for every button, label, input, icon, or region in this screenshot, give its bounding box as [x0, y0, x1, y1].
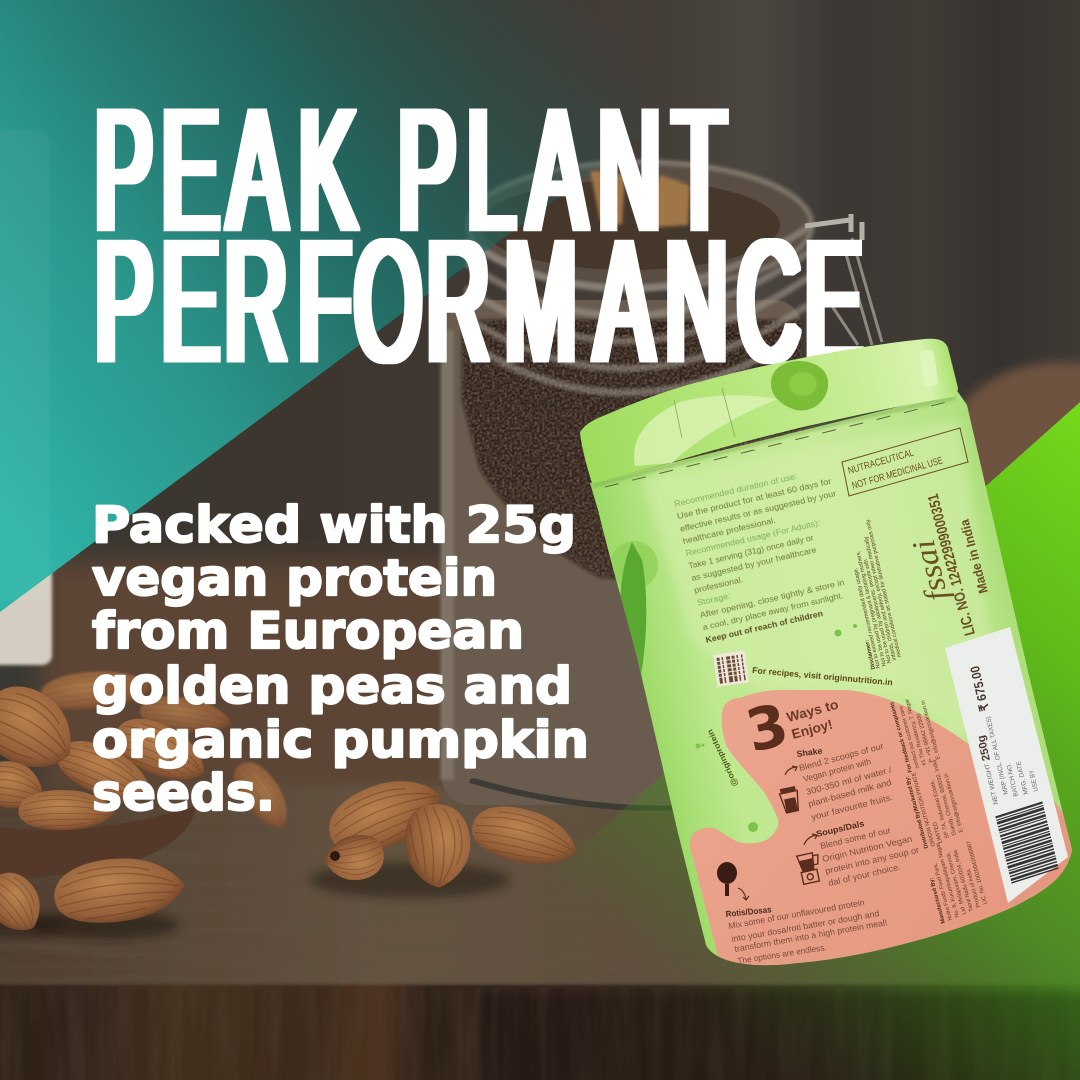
company details columns: ORIGIN NUTRITION PRIVATE — [911, 771, 937, 847]
body copy: Packed with 25g — [92, 496, 576, 554]
nutraceutical box — [842, 428, 968, 496]
rotis instructions: Rotis/Dosas — [725, 904, 772, 919]
usage text block: effective results or as suggested by your — [679, 488, 837, 534]
body copy: seeds. — [92, 764, 275, 822]
soups instructions: protein into any soup or — [824, 845, 920, 876]
bowl almonds — [0, 672, 215, 830]
company details columns: For feedback or complaints — [889, 701, 914, 773]
body copy: vegan protein — [92, 549, 497, 607]
body copy: from European — [92, 602, 524, 660]
usage text block: a cool, dry place away from sunlight. — [702, 590, 844, 632]
usage text block: Use the product for at least 60 days for — [676, 476, 832, 521]
white price label — [945, 627, 1068, 903]
three ways to enjoy heading — [740, 690, 840, 766]
disclaimer: Disclaimer: — [864, 639, 877, 670]
fssai licence — [905, 492, 991, 637]
usage text block: Recommended usage (For Adults): — [685, 518, 821, 558]
shake arrow — [785, 766, 797, 775]
company details columns: Nutra Foods Food Park, — [933, 861, 954, 921]
shake instructions: Vegan protein with — [802, 756, 872, 784]
rotis instructions — [725, 897, 888, 966]
lid — [580, 339, 958, 483]
dots — [696, 624, 857, 832]
company details columns: P: +91 98842 22500 — [916, 713, 935, 763]
usage text block — [673, 463, 863, 645]
nutraceutical box: NUTRACEUTICAL — [847, 447, 916, 477]
title: PEAK PLANT — [95, 73, 726, 268]
shake instructions: 300-350 ml of water / — [805, 764, 893, 797]
pea on lid — [771, 361, 828, 410]
barcode — [995, 801, 1059, 884]
net weight: 250g — [975, 734, 993, 762]
company details columns: SP 7A, Industrial Estate, — [929, 779, 951, 839]
usage text block: Keep out of reach of children — [705, 608, 824, 645]
social handle: @originprotein — [705, 728, 740, 788]
shake instructions — [796, 741, 894, 822]
usage text block: as suggested by your healthcare — [690, 544, 817, 583]
company details columns: Product of India. — [965, 867, 982, 908]
back almonds blurred — [39, 667, 154, 713]
usage text block: Take 1 serving (31g) once daily or — [687, 532, 815, 571]
soups instructions: Blend some of our — [819, 825, 892, 851]
product jar — [580, 339, 1080, 980]
white price label: USE BY — [1028, 768, 1040, 792]
disclaimer: Not to exceed recommended daily usage. — [853, 567, 882, 669]
company details columns: No. 8, Kurumbapalayam Nagar, — [935, 840, 961, 918]
almond shadows — [310, 862, 510, 898]
bowl — [0, 806, 196, 882]
company details columns: Guindy, Chennai, 600032, India — [932, 758, 958, 836]
pea pod illustration — [610, 541, 658, 680]
shake instructions: Blend 2 scoops of our — [798, 741, 885, 773]
QR code — [713, 651, 749, 687]
soups instructions — [815, 818, 920, 888]
table front edge — [0, 985, 1080, 1080]
company details columns — [889, 698, 989, 924]
blurred wooden table behind almonds — [40, 560, 470, 810]
fssai licence: fssai — [905, 536, 955, 605]
jar body — [590, 392, 1072, 965]
fssai licence: LIC. NO. 12422999000351 — [925, 492, 979, 637]
rotis instructions: into your dosa/roti batter or dough and — [731, 908, 880, 944]
soups instructions: Soups/Dals — [815, 818, 865, 839]
company details columns: Ltd. Melapuram, Chennai, — [945, 851, 968, 915]
usage text block: Storage: — [696, 590, 731, 608]
white bottle at far left — [0, 560, 52, 665]
soups arrow — [804, 834, 817, 845]
fssai licence: Made in India — [957, 517, 991, 595]
pan icon — [717, 862, 749, 900]
disclaimer: infants, children and elderly, except when medically — [863, 536, 898, 661]
rotis instructions: The options are endless. — [737, 942, 827, 966]
pink label area — [690, 690, 1080, 980]
shake instructions: plant-based milk and — [807, 777, 893, 809]
disclaimer: Not to be used by pregnant & lactating mothers. — [855, 550, 888, 667]
title — [95, 73, 863, 399]
shaker icon — [779, 786, 801, 814]
disclaimer — [853, 517, 903, 670]
body copy — [92, 496, 589, 822]
three ways to enjoy heading: 3 — [740, 690, 794, 766]
usage text block: Recommended duration of use: — [673, 471, 798, 509]
company details columns: #1 The Residency, T. Nagar — [904, 698, 928, 766]
three ways to enjoy heading: Ways to — [785, 697, 840, 725]
almonds and bowl — [0, 667, 583, 943]
company details columns: Tamil Nadu 602024, India — [952, 848, 975, 912]
white price label: MRP (INCL. OF ALL TAXES) — [985, 716, 1010, 795]
light blob on body — [642, 420, 1000, 740]
white price label: BATCH NO. — [1005, 762, 1020, 797]
body copy: golden peas and — [92, 657, 572, 715]
three ways to enjoy heading: Enjoy! — [790, 717, 834, 742]
title: PERFORMANCE — [95, 204, 863, 399]
usage text block: After opening, close tightly & store in — [699, 577, 846, 620]
white price label: MFG. DATE — [1015, 760, 1030, 795]
faint bottle ghost in teal — [0, 130, 50, 600]
green diagonal panel — [320, 402, 1080, 1080]
blender icon — [797, 852, 823, 884]
soups instructions: dal of your choice. — [827, 862, 902, 888]
company details columns: Manufactured By: — [929, 877, 947, 924]
company details columns: Distributed By/Marketed By: — [905, 775, 930, 849]
teal diagonal panel — [0, 0, 824, 612]
shake instructions: your favourite fruits. — [810, 792, 894, 822]
recipes link: For recipes, visit originnutrition.in — [752, 665, 893, 687]
disclaimer: medical conditions as stated for illustrative purposes only. — [865, 517, 903, 658]
disclaimer: Not to be used by adolescents, people with — [863, 559, 893, 664]
nutraceutical box: NOT FOR MEDICINAL USE — [851, 455, 944, 492]
rotis instructions: transform them into a high protein meal! — [734, 917, 888, 954]
wooden bowl on right — [950, 362, 1080, 518]
company details columns: contact our customer care — [898, 705, 921, 769]
body copy: organic pumpkin — [92, 711, 589, 769]
company details columns: E: info@originnutrition.in — [920, 700, 942, 760]
glass jar behind product — [440, 160, 882, 809]
company details columns: E: info@originnutrition.in — [943, 773, 965, 833]
white price label: NET WEIGHT — [984, 763, 1000, 805]
table surface — [0, 785, 1080, 990]
company details columns: LIMITED — [932, 821, 944, 844]
price: ₹ 675.00 — [967, 665, 992, 713]
shake instructions: Shake — [796, 745, 823, 759]
usage text block: healthcare professional. — [682, 515, 777, 546]
usage text block: professional. — [693, 574, 744, 595]
soups instructions: Origin Nutrition Vegan — [821, 833, 913, 864]
foreground almonds — [51, 852, 188, 928]
rotis instructions: Mix some of our unflavoured protein — [728, 897, 865, 931]
seam dashes — [605, 400, 955, 487]
lid shadow — [592, 398, 955, 486]
company details columns: LIC. No. 10020042000987 — [966, 840, 989, 905]
